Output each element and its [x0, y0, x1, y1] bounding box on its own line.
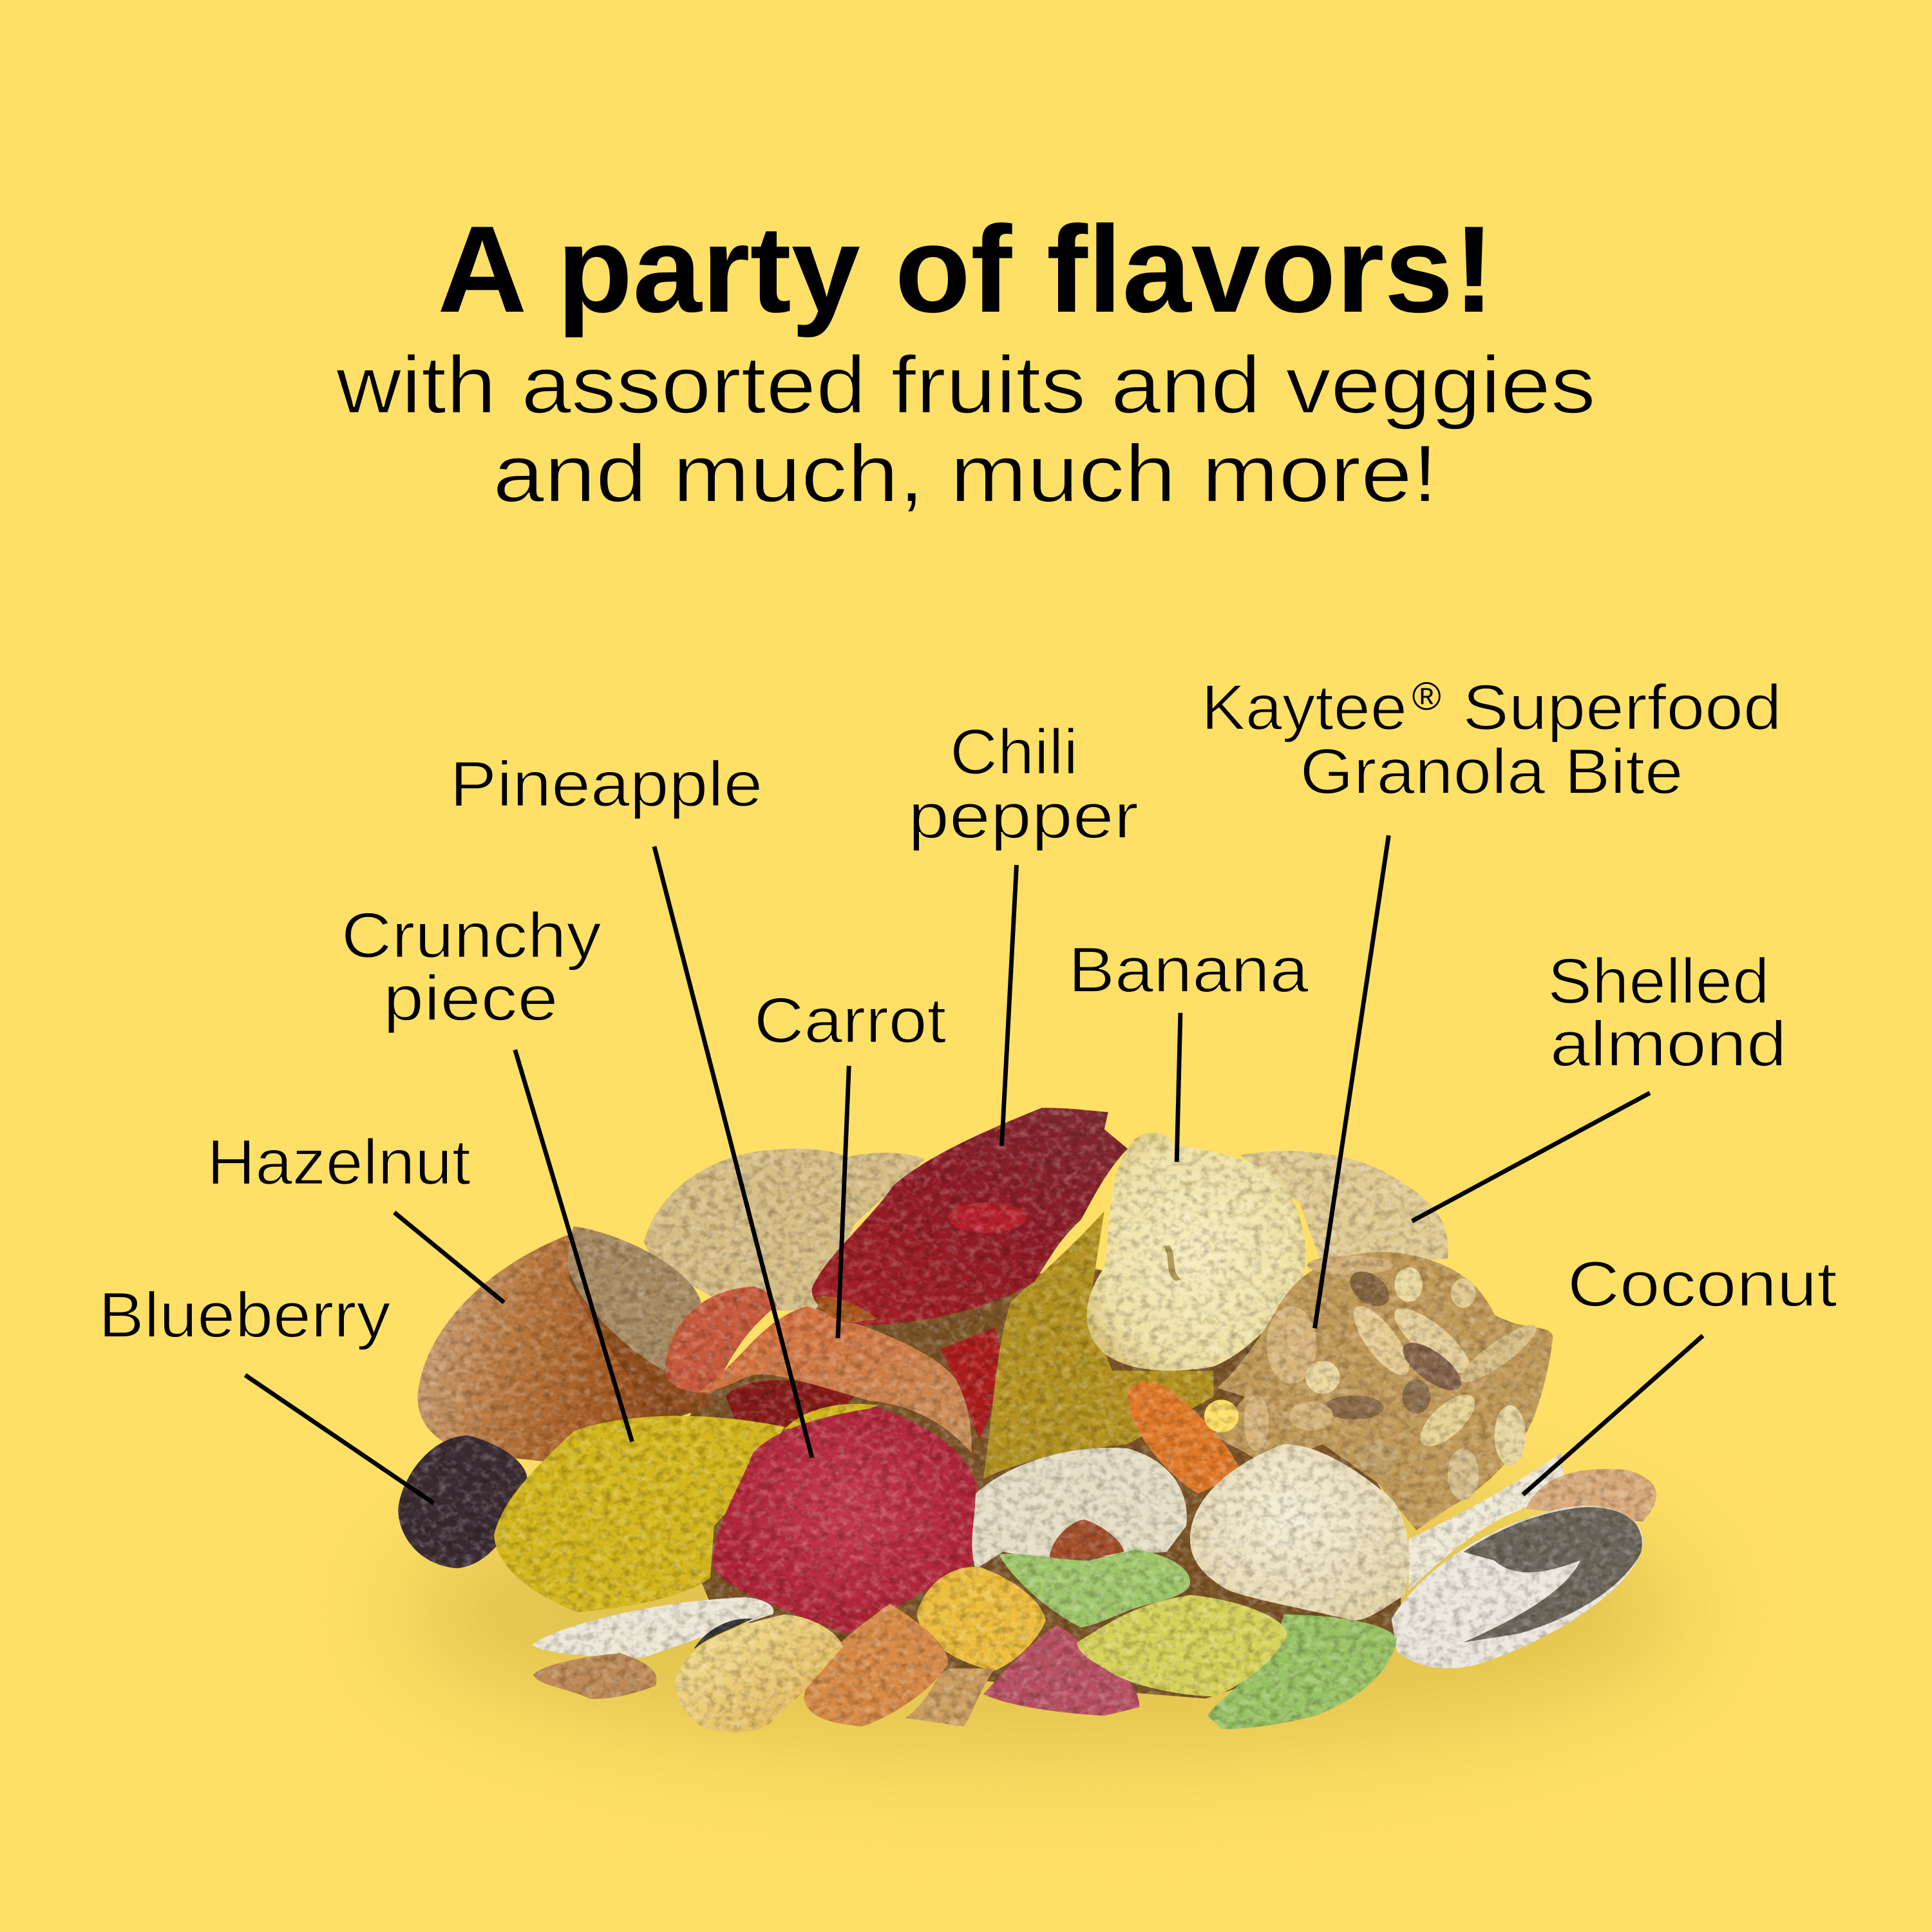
leader: Chili pepper	[1002, 865, 1016, 1146]
blueberry	[398, 1435, 527, 1568]
sunflower kernel	[533, 1597, 773, 1658]
leader: Blueberry	[245, 1375, 433, 1503]
tan seed	[1526, 1469, 1656, 1522]
green piece top	[999, 1549, 1190, 1627]
white corn	[675, 1615, 843, 1732]
food shadow	[399, 1462, 1687, 1758]
label: Shelled almond	[1548, 945, 1786, 1080]
label: Kaytee Superfood Granola Bite: Granola Bite	[1300, 736, 1683, 808]
label: Crunchy piece: piece	[383, 963, 558, 1034]
peanut shell	[644, 1149, 925, 1311]
coconut flake	[1408, 1453, 1565, 1591]
leader: Shelled almond	[1412, 1093, 1650, 1221]
label: Crunchy piece: Crunchy	[341, 900, 601, 972]
subtitle line one: with assorted fruits and veggies	[336, 339, 1596, 430]
food pile photo	[398, 1108, 1656, 1732]
label: Chili pepper	[908, 717, 1139, 852]
label: Shelled almond: almond	[1550, 1009, 1786, 1080]
label: Coconut: Coconut	[1567, 1249, 1837, 1320]
granola bite	[1204, 1252, 1553, 1530]
beige chunk	[905, 1669, 995, 1727]
shelled almond	[1241, 1151, 1448, 1267]
subtitle line two: and much, much more!	[493, 428, 1438, 519]
lime yellow piece	[1077, 1595, 1288, 1696]
yellow corn	[917, 1567, 1046, 1671]
orange chunk	[804, 1604, 948, 1727]
dark backing between pieces	[659, 1267, 1401, 1698]
small yellow piece	[784, 1404, 878, 1429]
pistachio	[972, 1448, 1187, 1569]
leader: Coconut	[1523, 1336, 1703, 1495]
banana chip	[1087, 1133, 1306, 1371]
orange sliver	[1128, 1382, 1241, 1493]
pineapple	[712, 1407, 983, 1634]
golden piece behind banana	[983, 1211, 1213, 1479]
black seed	[695, 1618, 753, 1649]
label: Kaytee Superfood Granola Bite: Kaytee	[1201, 672, 1407, 744]
leader: Carrot	[838, 1066, 849, 1338]
leader: Granola Bite	[1314, 835, 1388, 1329]
label: Blueberry: Blueberry	[99, 1280, 391, 1351]
label: Crunchy piece	[341, 900, 601, 1034]
white ball	[1190, 1444, 1409, 1620]
label: Shelled almond: Shelled	[1548, 945, 1769, 1017]
label: Kaytee Superfood Granola Bite	[1201, 672, 1782, 808]
green piece right	[1208, 1615, 1397, 1729]
title: A party of flavors!	[437, 200, 1495, 338]
dark red piece	[726, 1380, 855, 1427]
leader: Hazelnut	[394, 1213, 504, 1302]
label: Pineapple: Pineapple	[450, 748, 762, 820]
label: Hazelnut: Hazelnut	[207, 1127, 471, 1198]
leader: Banana	[1177, 1013, 1180, 1162]
leader: Pineapple	[654, 846, 812, 1457]
label: Carrot: Carrot	[754, 985, 946, 1057]
hazelnut	[417, 1226, 714, 1461]
label: Kaytee Superfood Granola Bite: ®	[1412, 674, 1441, 718]
pink piece	[983, 1625, 1139, 1716]
carrot slice	[665, 1287, 972, 1453]
heading block	[336, 200, 1596, 519]
brown crumb	[533, 1653, 656, 1699]
chili pepper	[811, 1108, 1128, 1325]
label: Chili pepper: pepper	[908, 781, 1139, 852]
label: Chili pepper: Chili	[950, 717, 1078, 788]
red slice behind	[940, 1328, 1007, 1440]
ingredient labels	[99, 672, 1837, 1503]
label: Kaytee Superfood Granola Bite: Superfood	[1463, 672, 1782, 744]
striped sunflower seed	[1392, 1506, 1643, 1669]
label: Banana: Banana	[1068, 934, 1309, 1006]
leader: Crunchy piece	[515, 1050, 632, 1442]
crunchy piece	[494, 1416, 784, 1613]
small brown piece	[1050, 1520, 1124, 1563]
